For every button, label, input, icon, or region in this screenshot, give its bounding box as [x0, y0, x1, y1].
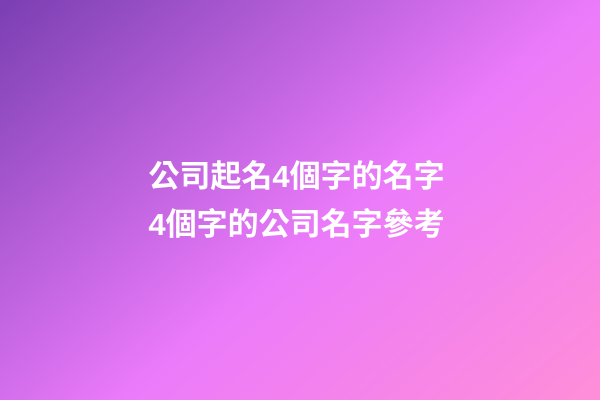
- title: [148, 159, 445, 242]
- title: 4個字的公司名字參考: [148, 207, 445, 242]
- title: 公司起名4個字的名字: [148, 159, 445, 194]
